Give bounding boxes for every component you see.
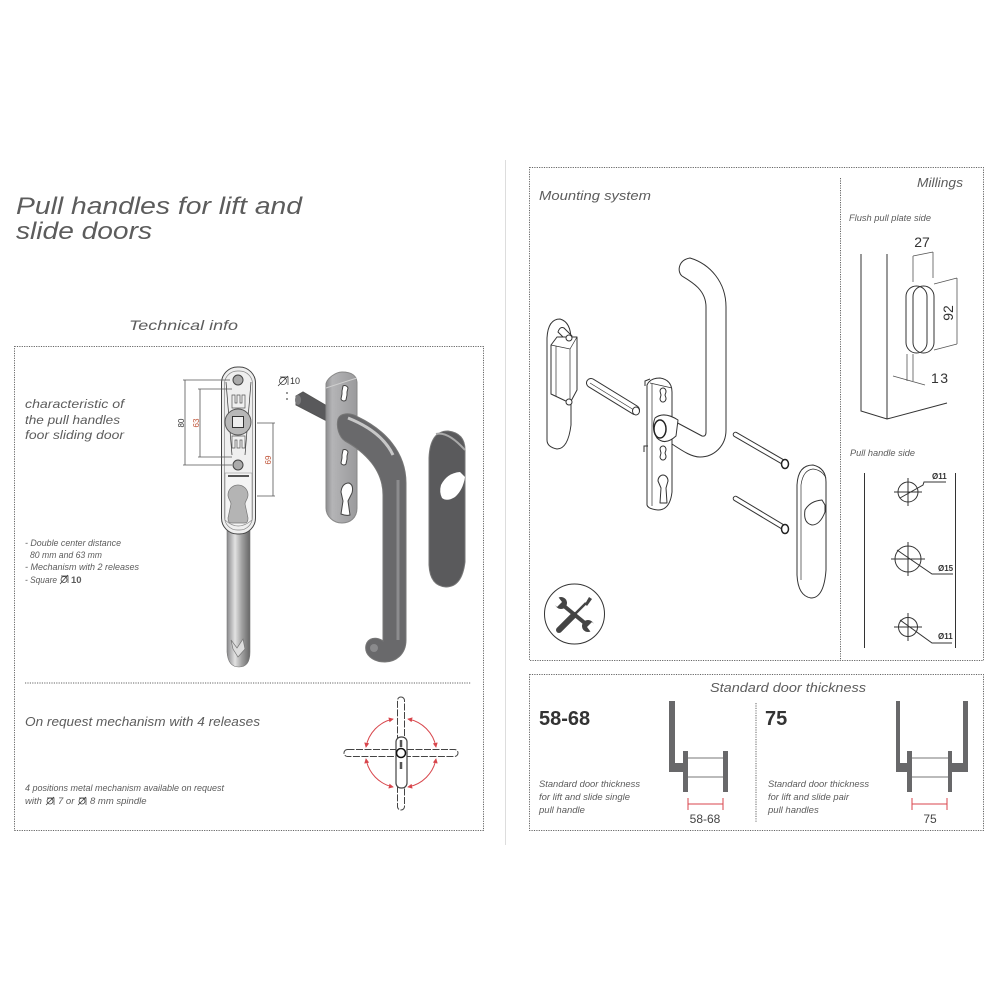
text: characteristic xyxy=(25,397,126,442)
heading: on request: On request mechanism with 4 releases xyxy=(25,715,260,729)
text: on request note: 7 or xyxy=(58,796,75,807)
text: pair handle note xyxy=(767,779,869,816)
milling drawing: flush pull plate: 13 xyxy=(931,370,948,386)
text: on request note: with xyxy=(25,796,42,807)
text: single handle note: for lift and slide single xyxy=(539,792,630,803)
handle front view xyxy=(222,367,256,667)
cover plate xyxy=(429,431,465,587)
spindle bar xyxy=(590,383,640,415)
arrows xyxy=(366,719,436,787)
centre divider xyxy=(504,160,506,845)
milling drawing: pull handle holes xyxy=(864,472,956,648)
dimensions front view: 69 xyxy=(264,455,273,464)
rear cover xyxy=(797,465,826,598)
left mounting plate xyxy=(547,319,577,449)
dimensions front view: 80 xyxy=(177,418,186,427)
text: pair handle note: pull handles xyxy=(767,805,819,816)
label: flush pull plate side: Flush pull plate side xyxy=(849,213,931,224)
four position mechanism diagram xyxy=(344,697,458,810)
milling drawing: pull handle holes: Ø15 xyxy=(938,564,954,573)
value: 58-68: 58-68 xyxy=(539,708,590,730)
diagram: 75 door xyxy=(896,701,968,826)
panel: standard door thickness xyxy=(530,674,984,830)
milling drawing: flush pull plate: 92 xyxy=(940,305,956,321)
title: slide doors xyxy=(16,218,152,245)
spindle label: 10 xyxy=(290,376,300,386)
heading: standard door thickness: Standard door thickness xyxy=(710,681,866,695)
text: feature list: 80 mm and 63 mm xyxy=(30,550,102,561)
text: feature list: - Square xyxy=(25,575,57,586)
text: single handle note: pull handle xyxy=(538,805,585,816)
text: feature list: - Mechanism with 2 releases xyxy=(25,562,139,573)
milling drawing: flush pull plate: 27 xyxy=(914,234,930,250)
title xyxy=(16,193,303,245)
text: on request note xyxy=(25,783,224,807)
milling drawing: flush pull plate xyxy=(861,234,957,419)
text: on request note: 8 mm spindle xyxy=(90,796,146,807)
text: characteristic: the pull handles xyxy=(25,413,120,427)
diagram: 75 door: 75 xyxy=(923,812,937,826)
milling drawing: pull handle holes: Ø11 xyxy=(932,472,947,481)
milling drawing: pull handle holes: Ø11 xyxy=(938,632,953,641)
handle outline xyxy=(644,258,726,510)
divider xyxy=(25,682,471,684)
text: single handle note: Standard door thickness xyxy=(539,779,640,790)
text: feature list xyxy=(25,538,139,586)
spindle label xyxy=(278,376,300,400)
diagram: 58-68 door: 58-68 xyxy=(690,812,721,826)
text: feature list: 10 xyxy=(71,575,82,586)
panel: technical info xyxy=(14,346,484,830)
icon: tools xyxy=(544,584,604,644)
handle 3D view xyxy=(295,372,406,662)
value: 75: 75 xyxy=(765,708,787,730)
heading: technical info: Technical info xyxy=(129,317,238,333)
heading: millings: Millings xyxy=(917,176,963,190)
dimensions front view xyxy=(177,380,275,496)
text: single handle note xyxy=(538,779,640,816)
heading: mounting system: Mounting system xyxy=(539,189,651,203)
screws xyxy=(736,434,788,534)
dimensions front view: 63 xyxy=(192,418,201,427)
text: characteristic: foor sliding door xyxy=(25,428,125,442)
diagram: 58-68 door xyxy=(669,701,728,826)
text: feature list: - Double center distance xyxy=(25,538,121,549)
label: pull handle side: Pull handle side xyxy=(850,448,915,459)
text: characteristic: characteristic of xyxy=(25,397,126,411)
text: pair handle note: for lift and slide pair xyxy=(768,792,850,803)
title: Pull handles for lift and xyxy=(16,193,303,220)
text: on request note: 4 positions metal mechanism available on request xyxy=(25,783,224,794)
text: pair handle note: Standard door thickness xyxy=(768,779,869,790)
panel: mounting system and millings xyxy=(530,168,984,660)
